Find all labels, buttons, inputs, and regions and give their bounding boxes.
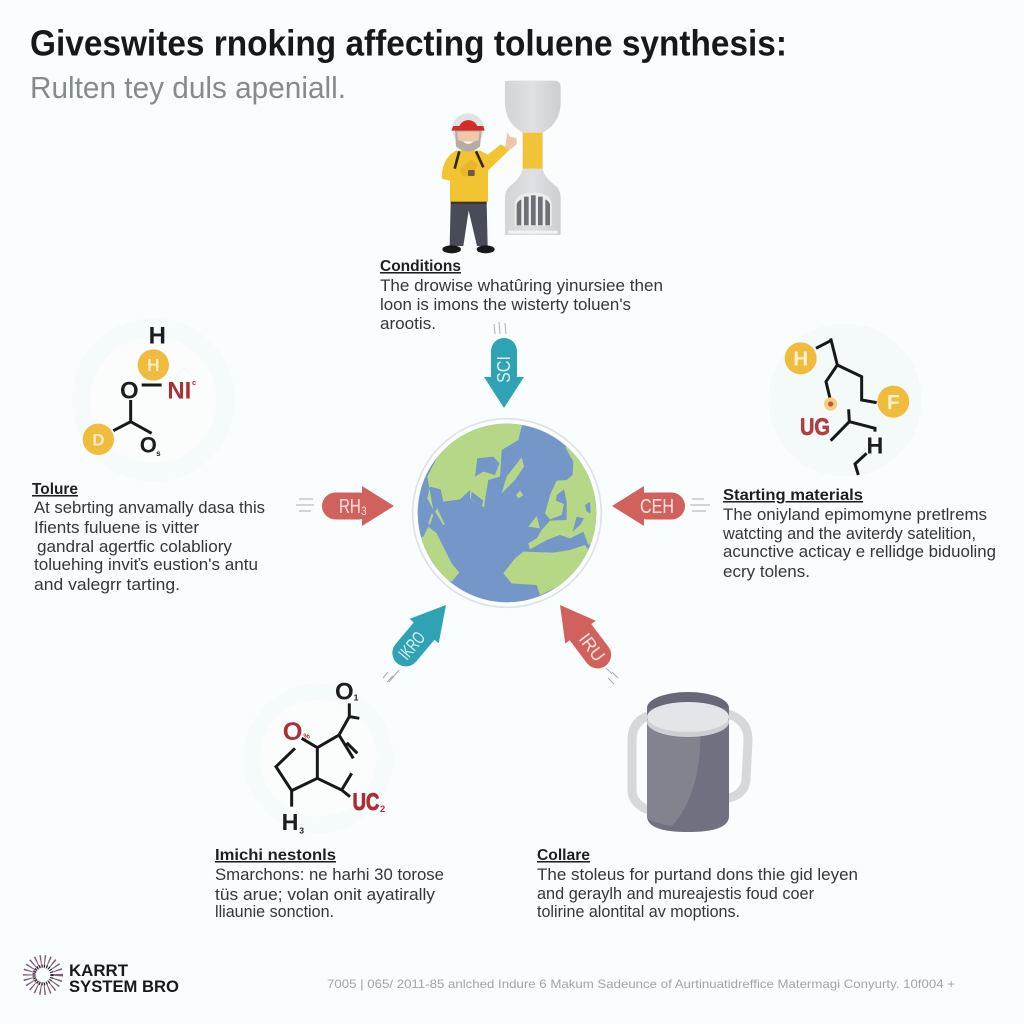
- molecule: starting materials panel: F: [887, 391, 900, 414]
- molecule: bottom-left panel: O: [335, 678, 354, 705]
- block: toluene text: [32, 481, 265, 594]
- molecule: toluene panel: H: [147, 355, 160, 375]
- molecule: bottom-left panel: 1: [354, 693, 359, 703]
- block: bottom-left text: [215, 847, 444, 921]
- block: toluene text: Ifients fuluene is vitter: [34, 519, 200, 537]
- block: collare text: The stoleus for purtand dons thie gid leyen: [537, 866, 858, 884]
- molecule: starting materials panel: UG: [800, 414, 830, 441]
- molecule: toluene panel: [72, 318, 235, 482]
- block: conditions: The drowise whatûring yinursiee then: [380, 277, 663, 295]
- icon: mug: [632, 692, 748, 832]
- arrow: left red: RH₃: [339, 496, 367, 518]
- globe: [413, 419, 607, 607]
- logo: [30, 961, 179, 996]
- illustration: engineer with device: [442, 81, 561, 253]
- molecule: toluene panel: O: [140, 433, 157, 458]
- block: bottom-left text: Imichi nestonls: [215, 847, 336, 864]
- arrow: bottom-left teal: IKRO: [395, 628, 429, 664]
- arrow: bottom-left teal: [383, 593, 461, 675]
- block: toluene text: and valegrr tarting.: [34, 576, 180, 594]
- block: collare text: tolirine alontital av moptions.: [537, 903, 740, 921]
- logo: KARRT: [69, 961, 129, 980]
- block: starting materials text: watcting and the aviterdy satelition,: [722, 525, 976, 543]
- block: toluene text: gandral agertfic colabliory: [37, 538, 233, 556]
- molecule: starting materials panel: H: [793, 348, 808, 371]
- molecule: bottom-left panel: 3: [299, 825, 304, 835]
- molecule: bottom-left panel: %: [303, 731, 310, 740]
- block: toluene text: toluehing inviťs eustion's antu: [34, 556, 258, 574]
- arrow: bottom-right red: IRU: [575, 629, 609, 665]
- molecule: toluene panel: NI: [167, 378, 191, 405]
- icon: grey funnel device: [505, 81, 561, 235]
- block: collare text: [537, 847, 858, 921]
- arrow: right red: CEH: [640, 496, 674, 518]
- block: collare text: and geraylh and mureajestis foud coer: [537, 885, 814, 903]
- icon: worker figure: [442, 113, 517, 253]
- block: starting materials text: acunctive acticay e rellidge biduoling: [723, 543, 996, 561]
- molecule: starting materials panel: H: [867, 433, 883, 459]
- molecule: toluene panel: H: [149, 322, 166, 349]
- molecule: bottom-left panel: O: [283, 718, 303, 746]
- molecule: bottom-left panel: 2: [380, 804, 385, 814]
- molecule: toluene panel: O: [120, 377, 139, 404]
- molecule: bottom-left panel: UC: [353, 789, 379, 816]
- block: conditions: arootis.: [380, 315, 436, 333]
- arrow: bottom-right red: [545, 594, 621, 677]
- block: bottom-left text: tüs arue; volan onit ayatirally: [215, 886, 436, 904]
- footer note: 7005 | 065/ 2011-85 anlched Indure 6 Makum Sadeunce of Aurtinuatidreffice Matermagi Conyurty. 10f004 +: [327, 977, 955, 991]
- block: starting materials text: ecry tolens.: [723, 563, 810, 581]
- subtitle: Rulten tey duls apeniall.: [30, 70, 346, 105]
- block: toluene text: At sebrting anvamally dasa this: [34, 499, 265, 517]
- logo: SYSTEM BRO: [69, 977, 179, 996]
- block: collare text: Collare: [537, 847, 590, 864]
- arrow: left red: [322, 486, 394, 526]
- block: bottom-left text: lliaunie sonction.: [215, 903, 334, 921]
- block: starting materials text: Starting materials: [723, 487, 863, 504]
- arrow: top teal: [484, 338, 524, 408]
- block: conditions: Conditions: [380, 258, 461, 275]
- block: conditions: loon is imons the wisterty toluen's: [380, 296, 631, 314]
- molecule: starting materials panel: [768, 323, 922, 477]
- block: bottom-left text: Smarchons: ne harhi 30 torose: [215, 866, 444, 884]
- arrow: right red: [612, 486, 685, 526]
- block: starting materials text: [722, 487, 996, 581]
- molecule: bottom-left panel: [243, 678, 393, 835]
- molecule: toluene panel: D: [92, 430, 104, 449]
- block: starting materials text: The oniyland epimomyne pretlrems: [723, 506, 987, 524]
- block: toluene text: Tolure: [32, 481, 78, 498]
- molecule: toluene panel: c: [192, 378, 196, 387]
- molecule: bottom-left panel: H: [282, 809, 298, 835]
- block: conditions: [380, 258, 663, 333]
- title: Giveswites rnoking affecting toluene synthesis:: [30, 22, 787, 64]
- molecule: toluene panel: s: [156, 449, 161, 458]
- arrow: top teal: SCI: [494, 356, 514, 383]
